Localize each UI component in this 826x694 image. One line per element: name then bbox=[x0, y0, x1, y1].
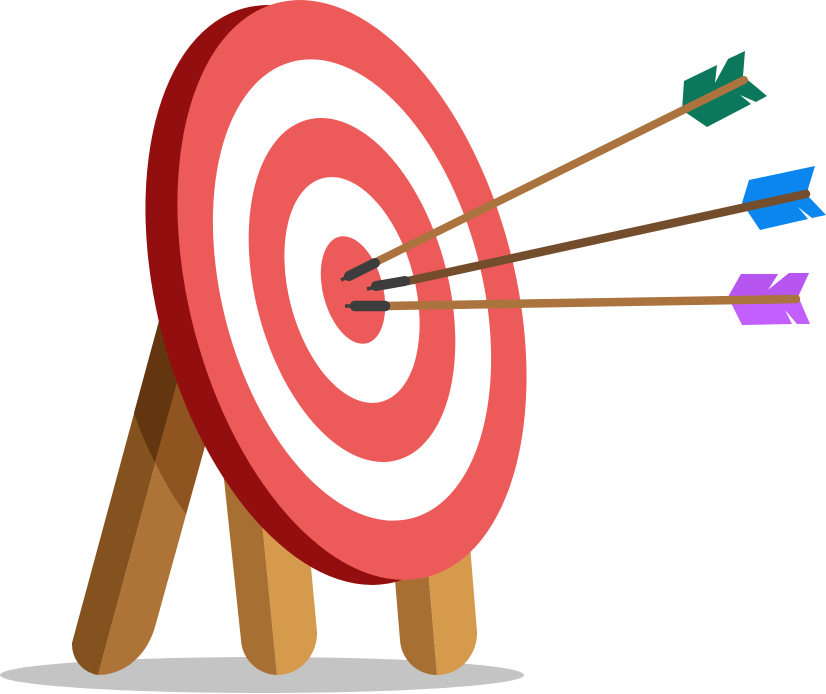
arrow: purple bbox=[345, 273, 810, 325]
blue arrow shaft bbox=[408, 194, 806, 281]
purple fletching bbox=[728, 273, 810, 325]
purple arrow tip bbox=[345, 304, 385, 308]
green arrow tip bbox=[341, 263, 375, 280]
purple arrow shaft bbox=[386, 299, 796, 306]
green fletching bbox=[682, 51, 767, 127]
bullseye bbox=[310, 229, 396, 351]
arrow: green bbox=[341, 51, 767, 280]
outer red ring bbox=[119, 0, 585, 618]
right stand leg bbox=[390, 520, 477, 675]
inner white ring bbox=[262, 162, 442, 418]
white ring bbox=[167, 29, 537, 551]
blue fletching bbox=[742, 166, 826, 230]
left stand leg bbox=[72, 310, 215, 675]
ground shadow bbox=[0, 657, 524, 693]
green arrow shaft bbox=[378, 80, 744, 261]
inner red ring bbox=[214, 95, 490, 485]
arrow: blue bbox=[367, 166, 826, 289]
middle stand leg bbox=[223, 470, 317, 675]
target board bbox=[87, 0, 585, 623]
blue arrow tip bbox=[367, 281, 405, 289]
purple fletching shaded half bbox=[728, 273, 809, 297]
board side edge bbox=[87, 0, 553, 623]
